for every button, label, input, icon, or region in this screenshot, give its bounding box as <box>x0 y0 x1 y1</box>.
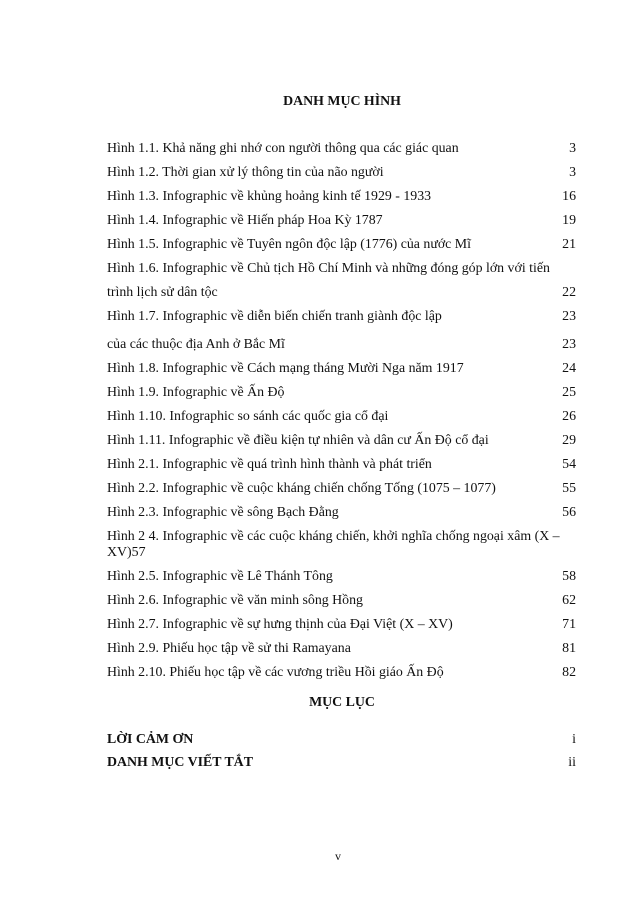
entry 1.7: Hình 1.7. Infographic về diễn biến chiến tranh giành độc lập <box>107 309 442 324</box>
figure list: 54 <box>562 457 576 472</box>
page number: v <box>335 849 341 863</box>
figure list: 55 <box>562 481 576 496</box>
entry 1.4: Hình 1.4. Infographic về Hiến pháp Hoa Kỳ 1787 <box>107 213 383 228</box>
entry 1.8: Hình 1.8. Infographic về Cách mạng tháng Mười Nga năm 1917 <box>107 361 464 376</box>
contents list: i <box>572 732 576 747</box>
figure list: trình lịch sử dân tộc <box>107 285 218 300</box>
figure list: của các thuộc địa Anh ở Bắc Mĩ <box>107 337 285 352</box>
figure list: 58 <box>562 569 576 584</box>
figure list: 56 <box>562 505 576 520</box>
entry 2.10: Hình 2.10. Phiếu học tập về các vương triều Hồi giáo Ấn Độ <box>107 665 444 680</box>
figure list: 24 <box>562 361 576 376</box>
contents list: ii <box>568 755 576 770</box>
entry 1.2: Hình 1.2. Thời gian xử lý thông tin của não người <box>107 165 384 180</box>
entry 2.3: Hình 2.3. Infographic về sông Bạch Đằng <box>107 505 339 520</box>
contents list <box>107 731 576 770</box>
figure list: 81 <box>562 641 576 656</box>
figure list: 21 <box>562 237 576 252</box>
figure list <box>107 141 576 680</box>
figure list: 19 <box>562 213 576 228</box>
entry 2.1: Hình 2.1. Infographic về quá trình hình thành và phát triển <box>107 457 432 472</box>
figure list: 26 <box>562 409 576 424</box>
figure list: 82 <box>562 665 576 680</box>
figure list: 25 <box>562 385 576 400</box>
entry: loi cam on: LỜI CẢM ƠN <box>107 732 193 747</box>
entry 2.4: Hình 2 4. Infographic về các cuộc kháng chiến, khởi nghĩa chống ngoại xâm (X – <box>107 529 560 544</box>
entry 2.2: Hình 2.2. Infographic về cuộc kháng chiến chống Tống (1075 – 1077) <box>107 481 496 496</box>
entry 1.9: Hình 1.9. Infographic về Ấn Độ <box>107 385 284 400</box>
entry 1.10: Hình 1.10. Infographic so sánh các quốc gia cổ đại <box>107 409 388 424</box>
heading: muc luc: MỤC LỤC <box>309 695 375 710</box>
figure list: 23 <box>562 309 576 324</box>
entry 1.11: Hình 1.11. Infographic về điều kiện tự nhiên và dân cư Ấn Độ cổ đại <box>107 433 489 448</box>
figure list: 16 <box>562 189 576 204</box>
entry 1.5: Hình 1.5. Infographic về Tuyên ngôn độc lập (1776) của nước Mĩ <box>107 237 471 252</box>
entry 1.6: Hình 1.6. Infographic về Chủ tịch Hồ Chí Minh và những đóng góp lớn với tiến <box>107 261 550 276</box>
figure list: 29 <box>562 433 576 448</box>
figure list: 22 <box>562 285 576 300</box>
entry 1.3: Hình 1.3. Infographic về khủng hoảng kinh tế 1929 - 1933 <box>107 189 431 204</box>
figure list: 62 <box>562 593 576 608</box>
entry 2.7: Hình 2.7. Infographic về sự hưng thịnh của Đại Việt (X – XV) <box>107 617 453 632</box>
entry 2.5: Hình 2.5. Infographic về Lê Thánh Tông <box>107 569 333 584</box>
figure list: 3 <box>569 141 576 156</box>
entry 1.1: Hình 1.1. Khả năng ghi nhớ con người thông qua các giác quan <box>107 141 459 156</box>
figure list: 3 <box>569 165 576 180</box>
figure list: 23 <box>562 337 576 352</box>
figure list: XV)57 <box>107 545 146 560</box>
entry: danh muc viet tat: DANH MỤC VIẾT TẮT <box>107 755 253 770</box>
entry 2.9: Hình 2.9. Phiếu học tập về sử thi Ramayana <box>107 641 351 656</box>
entry 2.6: Hình 2.6. Infographic về văn minh sông Hồng <box>107 593 363 608</box>
title: danh muc hinh: DANH MỤC HÌNH <box>283 94 401 109</box>
figure list: 71 <box>562 617 576 632</box>
